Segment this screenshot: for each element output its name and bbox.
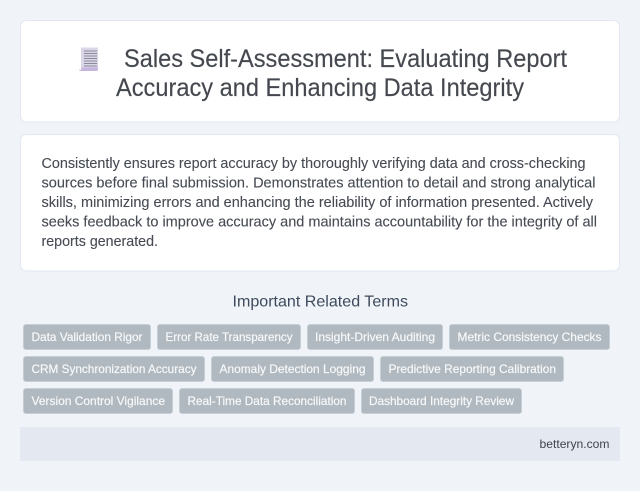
panel: title card: [20, 20, 620, 122]
tag: Predictive Reporting Calibration: [388, 362, 556, 376]
tag: [380, 356, 564, 382]
text block: description: sources before final submission. Demonstrates attention to detail and strong analytical: [42, 176, 595, 192]
tag: Data Validation Rigor: [32, 330, 142, 344]
icon: report scroll: [79, 48, 98, 71]
footer bar: [20, 427, 620, 461]
tag: [362, 388, 522, 414]
tag: Real-Time Data Reconciliation: [188, 394, 346, 408]
footer text: betteryn.com: [540, 437, 610, 451]
title: [116, 45, 567, 102]
title: Sales Self-Assessment: Evaluating Report: [124, 45, 567, 73]
text block: description: Consistently ensures report accuracy by thoroughly verifying data and cross-checking: [42, 156, 586, 172]
tag: Insight-Driven Auditing: [315, 330, 435, 344]
text block: description: seeks feedback to improve accuracy and maintains accountability for the integrity of all: [42, 214, 597, 230]
tag: Dashboard Integrity Review: [369, 394, 514, 408]
tag: [180, 388, 354, 414]
tag: [308, 324, 442, 350]
tag: Version Control Vigilance: [32, 394, 165, 408]
tag: [24, 388, 172, 414]
title: Accuracy and Enhancing Data Integrity: [116, 74, 524, 102]
heading: related terms: Important Related Terms: [232, 294, 408, 310]
tag: CRM Synchronization Accuracy: [32, 362, 196, 376]
text block: description: reports generated.: [42, 234, 158, 250]
tag: Error Rate Transparency: [166, 330, 292, 344]
tag group: related terms: [24, 324, 610, 414]
tag: Anomaly Detection Logging: [220, 362, 366, 376]
text block: description: [42, 156, 597, 250]
tag: [450, 324, 610, 350]
tag: [212, 356, 374, 382]
text block: description: skills, minimizing errors and enhancing the reliability of information presented. Actively: [42, 195, 594, 211]
panel: description card: [20, 134, 620, 271]
tag: [158, 324, 300, 350]
tag: [24, 324, 150, 350]
tag: Metric Consistency Checks: [458, 330, 602, 344]
tag: [24, 356, 204, 382]
